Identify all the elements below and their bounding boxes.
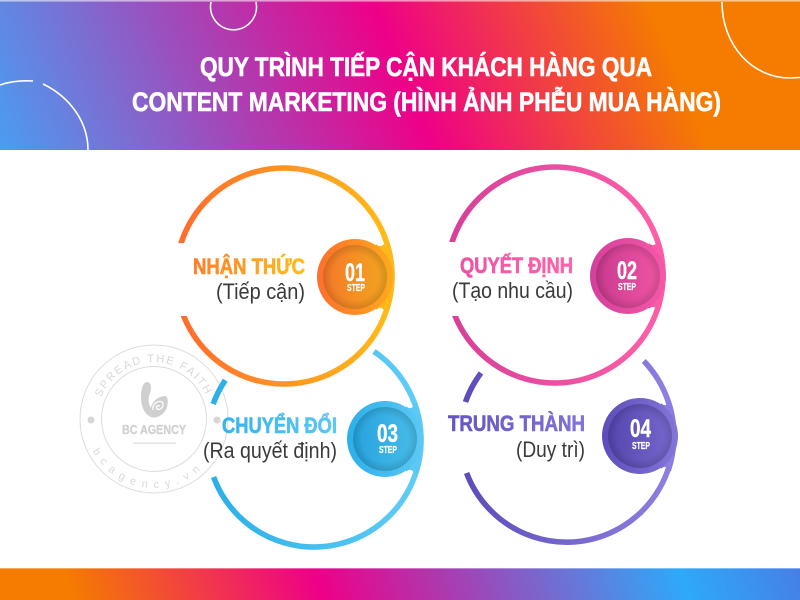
connector 01	[376, 240, 395, 315]
footer highlight line	[0, 568, 800, 569]
watermark: BC Agency stamp: BC AGENCY	[122, 422, 186, 437]
watermark: BC Agency stamp	[80, 344, 228, 494]
badge 01: STEP	[347, 283, 365, 294]
panel: step 04 trung thành	[448, 361, 690, 542]
subtext 02: (Tạo nhu cầu)	[452, 278, 573, 303]
watermark: BC Agency stamp: SPREAD THE FAITH	[95, 354, 212, 396]
heading 01: NHẬN THỨC	[193, 254, 305, 279]
ring 03	[213, 351, 421, 547]
decorative header circles	[0, 2, 800, 150]
subtext 01: (Tiếp cận)	[216, 279, 305, 304]
badge 02: STEP	[618, 282, 636, 293]
badge 04: STEP	[632, 441, 650, 452]
title	[132, 51, 721, 117]
subtext 04: (Duy trì)	[516, 437, 585, 462]
header gradient banner	[0, 0, 800, 150]
panel: step 01 nhận thức	[176, 168, 405, 384]
heading 03: CHUYỂN ĐỔI	[222, 413, 337, 438]
badge 01: 01	[345, 259, 365, 287]
ring 02	[447, 167, 663, 383]
badge 04: 04	[630, 415, 651, 443]
ring 01	[176, 168, 392, 384]
heading 02: QUYẾT ĐỊNH	[460, 253, 573, 278]
top highlight line	[0, 0, 800, 2]
badge 01	[317, 239, 393, 315]
ring 04	[466, 361, 674, 542]
footer gradient band	[0, 568, 800, 600]
badge 02	[590, 238, 666, 314]
badge 03	[347, 401, 423, 477]
connector 02	[649, 238, 666, 312]
panel: step 02 quyết định	[447, 167, 678, 383]
badge 03: STEP	[379, 445, 397, 456]
badge 03: 03	[377, 420, 398, 448]
badge 02: 02	[617, 257, 637, 285]
heading 04: TRUNG THÀNH	[448, 411, 585, 436]
connector 04	[661, 400, 676, 472]
badge 04	[602, 398, 678, 474]
subtext 03: (Ra quyết định)	[203, 438, 337, 463]
connector 03	[406, 402, 424, 477]
title: QUY TRÌNH TIẾP CẬN KHÁCH HÀNG QUA	[200, 51, 652, 82]
watermark: BC Agency stamp: bcagency.vn	[93, 448, 200, 490]
panel: step 03 chuyển đổi	[203, 351, 435, 547]
